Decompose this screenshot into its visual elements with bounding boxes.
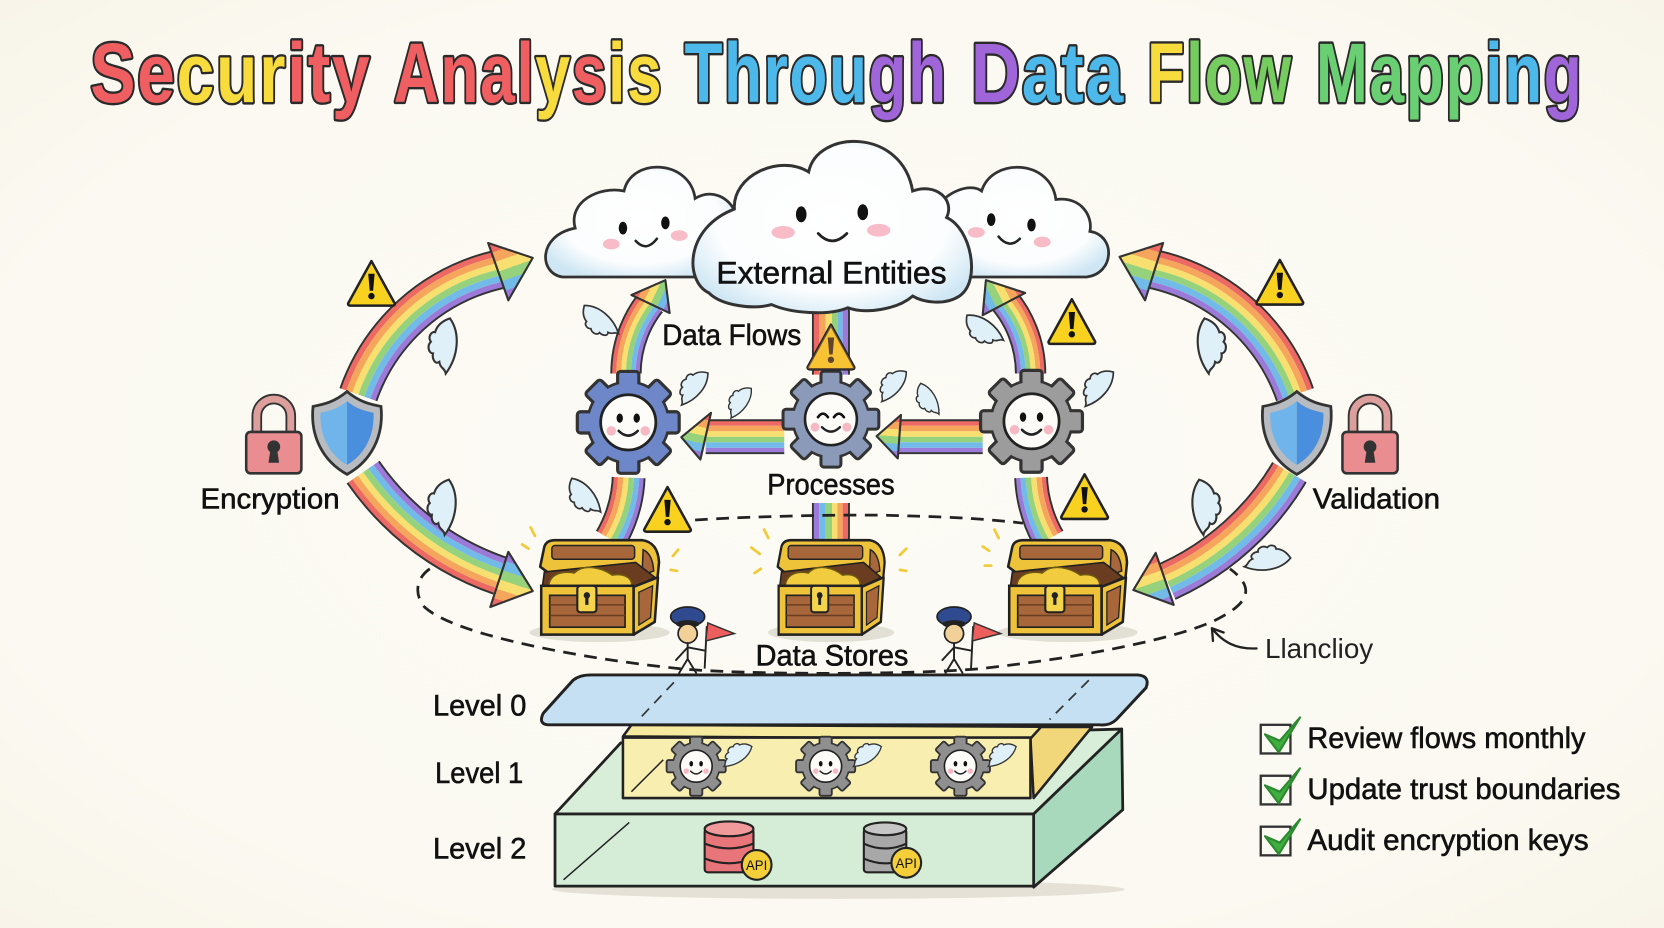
label: Encryption: Encryption bbox=[201, 483, 340, 515]
icon: grey database with API badge: API bbox=[896, 856, 917, 871]
title: Data bbox=[971, 25, 1125, 120]
cloud: center bbox=[693, 141, 972, 313]
cloud: left bbox=[546, 167, 734, 277]
label: Level 0: Level 0 bbox=[433, 689, 526, 722]
icon: small gear 1 bbox=[667, 737, 726, 796]
checklist bbox=[1261, 717, 1620, 857]
icon: wing inner upper left bbox=[575, 301, 624, 345]
arrow: inner upper right bbox=[992, 296, 1046, 374]
icon: wing inner lower left bbox=[560, 475, 607, 522]
icon: gear right process bbox=[981, 370, 1082, 472]
icon: lock left bbox=[246, 399, 301, 473]
icon: chest left bbox=[530, 540, 670, 642]
icon: gear middle process bbox=[783, 371, 879, 467]
cloud: right bbox=[934, 167, 1109, 277]
icon: small gear 3 bbox=[931, 737, 990, 796]
arrow head: upper right bbox=[1120, 243, 1163, 300]
icon: chest middle bbox=[768, 540, 894, 642]
arrow head: inner upper right bbox=[983, 280, 1025, 315]
label: boundary name: Llanclioy bbox=[1265, 633, 1373, 664]
icon: grey database with API badge bbox=[864, 822, 921, 878]
icon: warning inner lower left bbox=[644, 487, 691, 532]
icon: red database with API badge bbox=[705, 821, 772, 880]
title bbox=[90, 25, 1583, 120]
arrow: lower right rainbow bbox=[1160, 462, 1306, 600]
label: Processes: Processes bbox=[767, 469, 895, 502]
arrow: upper right rainbow bbox=[1150, 250, 1314, 402]
icon: lock right bbox=[1342, 399, 1398, 473]
label: Level 2: Level 2 bbox=[433, 833, 526, 866]
icon: wing right gear bbox=[1074, 362, 1118, 411]
arrow head: inner upper left bbox=[631, 280, 670, 313]
arrow: inner lower right bbox=[1014, 476, 1064, 539]
guard left bbox=[671, 607, 734, 673]
icon: warning inner upper right bbox=[1048, 299, 1095, 344]
arrow: upper left rainbow bbox=[340, 248, 506, 402]
icon: gear left process bbox=[577, 371, 679, 473]
icon: small gear 2 bbox=[796, 737, 855, 796]
icon: chest right bbox=[998, 540, 1138, 642]
title: Mapping bbox=[1316, 25, 1583, 120]
checkbox 3 bbox=[1261, 819, 1300, 855]
arrow: center lower band bbox=[813, 503, 849, 545]
arrow: horizontal left bbox=[681, 413, 784, 460]
label: Level 1: Level 1 bbox=[435, 757, 523, 790]
arrow: inner upper left bbox=[610, 298, 663, 374]
icon: warning upper right bbox=[1256, 260, 1303, 305]
icon: small gear wing 1 bbox=[717, 736, 755, 772]
guard right bbox=[937, 607, 1001, 673]
label: Data Flows: Data Flows bbox=[662, 319, 801, 352]
icon: wing far lower right bbox=[1241, 540, 1292, 576]
icon: shield right bbox=[1262, 392, 1331, 474]
trust boundary dashed ellipse bbox=[418, 515, 1246, 673]
title: Through bbox=[684, 25, 948, 120]
checkbox 1 bbox=[1261, 717, 1300, 753]
arrow: horizontal right bbox=[877, 415, 983, 458]
title: Flow bbox=[1147, 25, 1293, 120]
checklist item 2: Update trust boundaries bbox=[1307, 773, 1620, 806]
level 2 box bbox=[552, 729, 1125, 899]
checklist item 1: Review flows monthly bbox=[1307, 722, 1586, 755]
icon: wing left gear bbox=[671, 364, 712, 410]
icon: wing upper right arc bbox=[1198, 318, 1226, 374]
label: Data Stores: Data Stores bbox=[756, 639, 908, 672]
icon: warning inner lower right bbox=[1061, 474, 1108, 519]
level 1 box bbox=[623, 725, 1092, 798]
arrow: lower left rainbow bbox=[346, 460, 506, 594]
arrow head: lower right bbox=[1133, 553, 1174, 605]
arrow: center top data flow band bbox=[813, 302, 849, 375]
arrow head: upper left bbox=[488, 243, 533, 300]
arrow: inner lower left bbox=[596, 476, 646, 539]
icon: warning upper left bbox=[348, 261, 395, 306]
icon: wing upper left arc bbox=[429, 318, 457, 374]
title: Analysis bbox=[394, 25, 663, 120]
icon: wing lower left arc bbox=[427, 480, 456, 535]
icon: wing left horizontal arrow bbox=[721, 381, 755, 422]
checklist item 3: Audit encryption keys bbox=[1307, 824, 1589, 857]
label: Validation: Validation bbox=[1313, 483, 1440, 515]
level 0 slab bbox=[541, 675, 1147, 725]
arrow head: lower left bbox=[490, 552, 533, 607]
checkbox 2 bbox=[1261, 768, 1300, 804]
icon: wing right horizontal arrow bbox=[909, 381, 945, 421]
label: External Entities: External Entities bbox=[716, 254, 947, 290]
title: Security bbox=[90, 25, 371, 120]
sparkles around chests bbox=[522, 527, 999, 573]
icon: warning center bbox=[808, 325, 854, 369]
icon: shield left bbox=[313, 392, 381, 474]
icon: red database with API badge: API bbox=[746, 858, 767, 873]
icon: wing inner upper right bbox=[958, 311, 1008, 352]
icon: small gear wing 3 bbox=[981, 736, 1019, 772]
icon: wing middle gear bbox=[872, 363, 910, 406]
label arrow to boundary bbox=[1212, 628, 1256, 649]
icon: wing lower right arc bbox=[1192, 480, 1221, 535]
icon: small gear wing 2 bbox=[847, 736, 884, 772]
